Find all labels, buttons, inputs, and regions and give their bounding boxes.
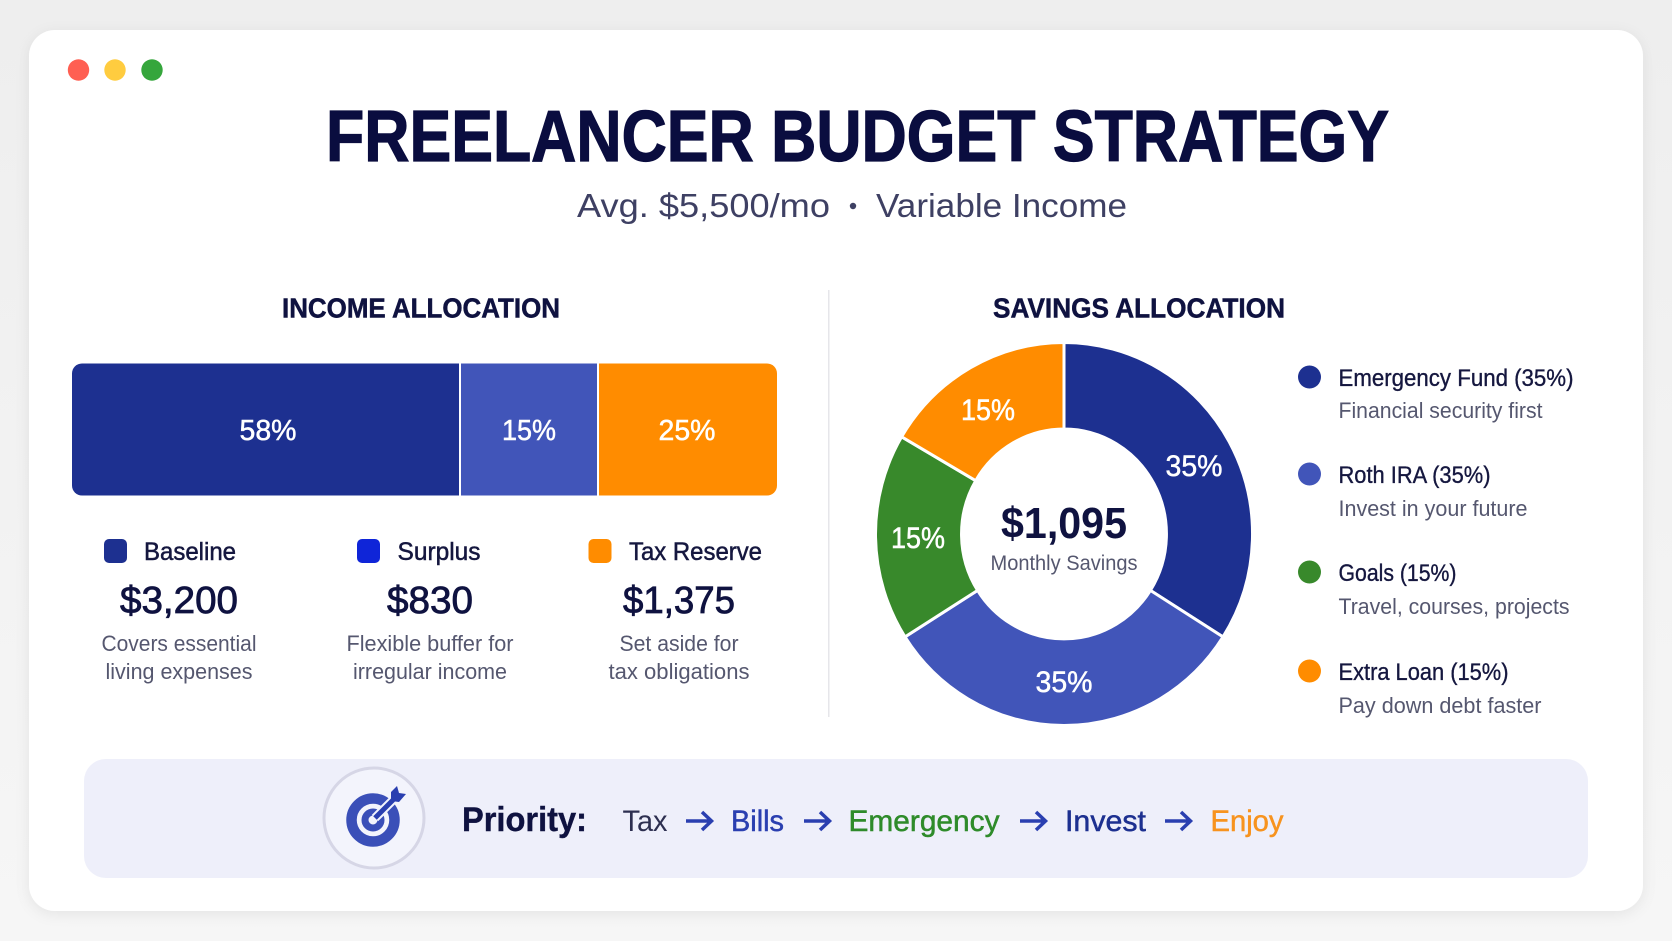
stacked bar chart (72, 363, 777, 496)
window control dots (68, 59, 163, 81)
item: surplus: $830 (387, 580, 473, 622)
item: baseline: $3,200 (120, 580, 238, 622)
arrow (804, 812, 830, 830)
donut labels: 35% (1166, 450, 1222, 483)
legend: emergency fund: Financial security first (1338, 398, 1542, 423)
item: surplus: Surplus (398, 538, 480, 566)
panel: savings allocation (875, 292, 1574, 726)
item: tax reserve: Tax Reserve (629, 538, 762, 566)
item: baseline: Covers essential (102, 631, 256, 656)
panel: priority bar (84, 759, 1588, 878)
step: bills: Bills (731, 805, 784, 838)
item: tax reserve: $1,375 (623, 580, 735, 622)
legend: goals: Goals (15%) (1338, 560, 1456, 587)
donut labels: 15% (961, 394, 1015, 427)
legend: goals (1298, 560, 1570, 619)
step: invest: Invest (1065, 805, 1147, 838)
item: baseline: Baseline (144, 538, 236, 566)
item: surplus (346, 538, 514, 684)
donut labels: 35% (1036, 666, 1092, 699)
stacked bar chart: 58% (240, 415, 296, 447)
arrow (686, 812, 712, 830)
icon: target with arrow (324, 768, 424, 868)
arrow (1020, 812, 1046, 830)
subtitle: Variable Income (876, 187, 1127, 224)
item: baseline (102, 538, 256, 684)
donut center: monthly savings: $1,095 (1001, 499, 1127, 548)
item: baseline: living expenses (106, 659, 252, 684)
step: emergency: Emergency (848, 805, 1000, 838)
legend: emergency fund (1298, 365, 1574, 423)
legend: roth ira: Roth IRA (35%) (1338, 462, 1490, 489)
item: tax reserve (588, 538, 762, 684)
title: FREELANCER BUDGET STRATEGY (326, 97, 1389, 177)
legend: extra loan: Pay down debt faster (1338, 693, 1542, 718)
donut chart (875, 342, 1253, 726)
arrow (1165, 812, 1190, 830)
donut labels (891, 394, 1222, 699)
heading: income allocation: INCOME ALLOCATION (282, 292, 560, 324)
panel: income allocation (72, 292, 777, 684)
item: tax reserve: Set aside for (620, 631, 738, 656)
donut labels: 15% (891, 522, 945, 555)
label: priority: Priority: (462, 801, 587, 839)
stacked bar chart: 25% (658, 415, 716, 447)
stacked bar chart: 15% (502, 415, 556, 447)
item: surplus: irregular income (353, 659, 507, 684)
subtitle (577, 187, 1127, 224)
heading: savings allocation: SAVINGS ALLOCATION (993, 292, 1285, 324)
legend: extra loan (1298, 659, 1542, 718)
item: surplus: Flexible buffer for (346, 631, 514, 656)
legend: roth ira (1298, 462, 1528, 521)
legend: roth ira: Invest in your future (1338, 496, 1528, 521)
item: tax reserve: tax obligations (608, 659, 750, 684)
donut center: monthly savings (990, 499, 1138, 575)
donut center: monthly savings: Monthly Savings (990, 552, 1138, 575)
legend: extra loan: Extra Loan (15%) (1338, 659, 1508, 686)
step: enjoy: Enjoy (1210, 805, 1284, 838)
step: tax: Tax (622, 805, 668, 838)
subtitle: Avg. $5,500/mo (577, 187, 830, 224)
legend: emergency fund: Emergency Fund (35%) (1338, 365, 1574, 392)
legend: goals: Travel, courses, projects (1338, 594, 1570, 619)
